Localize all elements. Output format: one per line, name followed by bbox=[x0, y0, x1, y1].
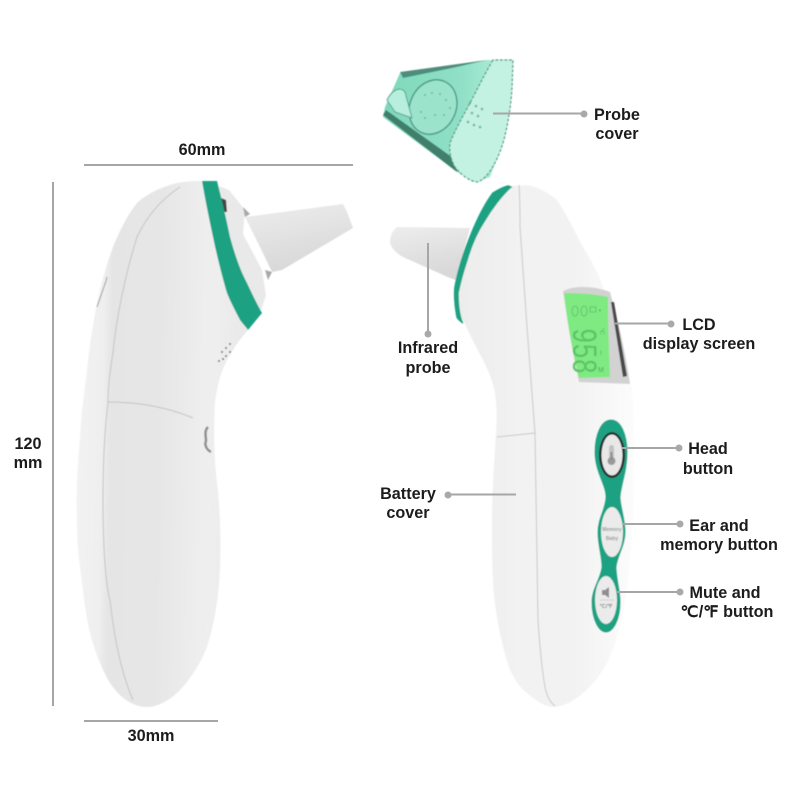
label: infrared probe bbox=[398, 243, 458, 377]
label: LCD display screen: LCD bbox=[682, 316, 716, 334]
head button bbox=[599, 432, 625, 478]
label: LCD display screen bbox=[615, 316, 755, 353]
cover dark lower edge bbox=[383, 110, 457, 172]
LCD reading: 958 bbox=[562, 328, 602, 374]
cover dots bbox=[420, 92, 483, 128]
label: probe cover bbox=[493, 106, 640, 143]
label: head button: button bbox=[683, 460, 733, 478]
LCD reading: °C bbox=[598, 328, 604, 335]
label: mute and unit button: Mute and bbox=[689, 584, 761, 602]
device: side view thermometer bbox=[77, 181, 353, 707]
dimension: 30mm depth: 30mm bbox=[128, 727, 174, 745]
label: head button bbox=[622, 440, 733, 478]
LCD reading: ◖ bbox=[598, 308, 602, 314]
cover cone bbox=[383, 60, 513, 182]
label: battery cover bbox=[380, 485, 516, 522]
label: ear and memory button bbox=[623, 517, 778, 554]
cover inner oval bbox=[400, 72, 466, 142]
label: head button: Head bbox=[688, 440, 728, 458]
LCD frame bbox=[563, 287, 630, 384]
label: mute and unit button: ℃/℉ button bbox=[681, 603, 773, 621]
dimension: 60mm width: 60mm bbox=[179, 141, 225, 159]
green band side view bbox=[202, 181, 262, 330]
cover dark upper edge bbox=[400, 60, 487, 78]
label: ear and memory button: Ear and bbox=[689, 517, 749, 535]
button strip: Memory bbox=[602, 527, 622, 533]
memory button bbox=[601, 507, 623, 557]
body front view bbox=[454, 185, 634, 707]
cover opening rim bbox=[450, 60, 513, 182]
button strip: ℃/℉ bbox=[600, 603, 613, 610]
probe cover bbox=[383, 60, 513, 182]
label: battery cover: Battery bbox=[380, 485, 436, 503]
mute button bbox=[595, 576, 617, 624]
side switch bbox=[205, 427, 211, 452]
green band front view bbox=[455, 186, 511, 323]
label: ear and memory button: memory button bbox=[660, 536, 778, 554]
label: LCD display screen: display screen bbox=[643, 335, 755, 353]
LCD reading: M bbox=[598, 367, 604, 374]
dimension: 120mm height bbox=[14, 182, 53, 706]
label: mute and unit button bbox=[617, 584, 773, 621]
label: probe cover: cover bbox=[595, 125, 639, 143]
label: infrared probe: Infrared bbox=[398, 339, 458, 357]
LCD reading: I bbox=[600, 351, 602, 357]
cover tip window bbox=[387, 89, 412, 118]
LCD reading bbox=[562, 306, 604, 374]
probe head collar bbox=[216, 185, 266, 320]
body seam lines front bbox=[497, 185, 555, 706]
probe tip side view bbox=[245, 204, 353, 272]
button strip: Baby bbox=[606, 536, 618, 542]
dimension: 120mm height: mm bbox=[14, 454, 42, 472]
label: battery cover: cover bbox=[386, 504, 430, 522]
green button outline bbox=[591, 419, 628, 633]
LCD green screen bbox=[564, 293, 610, 378]
device: front view thermometer bbox=[390, 185, 634, 707]
infrared probe tip bbox=[390, 227, 470, 280]
LCD dark strip bbox=[611, 302, 627, 377]
body seam lines bbox=[103, 187, 193, 700]
label: probe cover: Probe bbox=[594, 106, 640, 124]
dimension: 30mm depth bbox=[84, 721, 218, 745]
speaker holes bbox=[218, 343, 231, 362]
label: infrared probe: probe bbox=[406, 359, 450, 377]
button strip bbox=[591, 419, 628, 633]
body side view bbox=[77, 181, 248, 707]
dimension: 120mm height: 120 bbox=[14, 435, 42, 453]
icon: thermometer bbox=[608, 445, 616, 465]
